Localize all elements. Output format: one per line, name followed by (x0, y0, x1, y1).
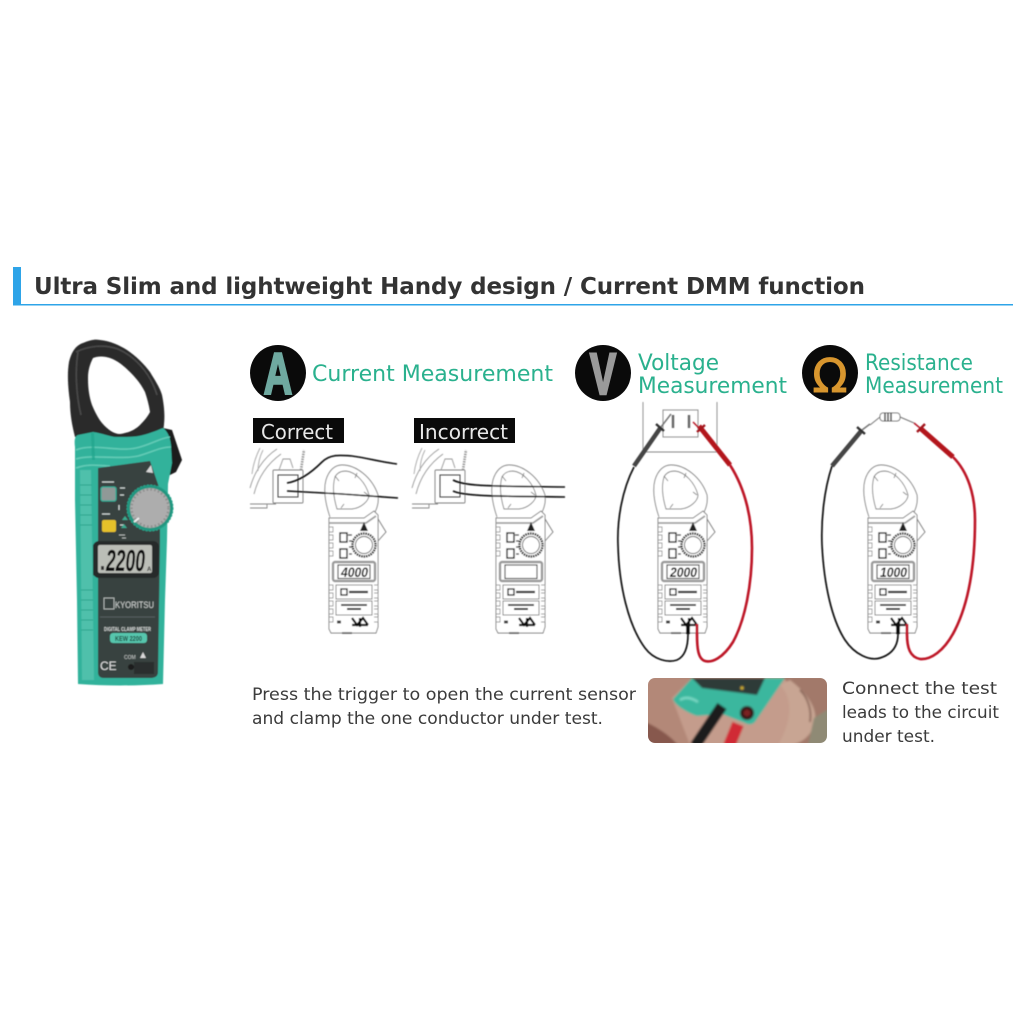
diagram: resistance measurement (822, 413, 975, 659)
LCD display: A (147, 567, 152, 573)
caption: test leads instructions: Connect the test (842, 679, 998, 698)
conductor wires (453, 480, 565, 487)
heading text: Ultra Slim and lightweight Handy design / Current DMM function (34, 274, 865, 300)
red test lead (693, 422, 752, 661)
tag: incorrect: Incorrect (419, 420, 508, 444)
icon: V (575, 341, 631, 407)
socket (412, 448, 466, 508)
black test lead (618, 414, 688, 661)
caption: test leads instructions: under test. (842, 727, 935, 746)
model label: DIGITAL CLAMP METER (104, 627, 151, 633)
model label: KEW 2200 (115, 634, 142, 643)
label: voltage measurement: Measurement (638, 374, 787, 399)
resistance measurement header (802, 345, 1003, 403)
icon: omega (802, 345, 858, 403)
display surround (93, 541, 159, 578)
current measurement header (250, 341, 553, 407)
caption: clamp instructions (252, 685, 636, 728)
product photo: clamp meter (68, 340, 182, 686)
CE mark and terminals: CE (100, 659, 117, 673)
dark face panel (93, 461, 160, 678)
label: resistance measurement (865, 351, 1003, 399)
display reading: 4000 (340, 564, 368, 580)
diagram: incorrect clamp (412, 448, 565, 633)
label: voltage measurement: Voltage (638, 351, 719, 376)
icon: V: V (590, 341, 616, 407)
label: resistance measurement: Resistance (865, 351, 973, 376)
label: current measurement: Current Measurement (312, 362, 553, 387)
model label (104, 627, 151, 643)
icon: omega: Ω (812, 349, 848, 403)
display reading: 2000 (669, 564, 697, 580)
rotary dial (127, 485, 173, 531)
brand text: KYORITSU (115, 600, 154, 611)
caption: test leads instructions: leads to the circuit (842, 703, 1000, 722)
tag: correct: Correct (261, 420, 333, 444)
trigger (163, 428, 182, 476)
heading accent bar (13, 267, 21, 304)
caption: test leads instructions (842, 679, 1000, 746)
red test lead (907, 423, 975, 659)
CE mark and terminals (100, 652, 154, 674)
wall outlet (643, 402, 717, 452)
LCD display: 2200 (105, 543, 145, 578)
display reading: 1000 (880, 564, 907, 580)
caption: clamp instructions: Press the trigger to open the current sensor (252, 685, 636, 704)
socket (250, 448, 304, 508)
brand text (100, 598, 155, 617)
meter line art (654, 465, 715, 633)
icon: A: A (264, 341, 292, 407)
meter line art (864, 465, 925, 633)
resistor (870, 413, 914, 425)
heading underline (13, 304, 1013, 306)
icon: A (250, 341, 306, 407)
caption: clamp instructions: and clamp the one conductor under test. (252, 709, 603, 728)
label: resistance measurement: Measurement (865, 374, 1003, 399)
black test lead (822, 424, 898, 659)
LCD display (98, 543, 152, 578)
section heading (13, 267, 1013, 306)
diagram: voltage measurement (618, 402, 752, 661)
meter line art (325, 465, 386, 633)
label: voltage measurement (638, 351, 787, 399)
meter body (75, 428, 172, 686)
diagram: correct clamp (250, 448, 398, 633)
CE mark and terminals: COM (124, 655, 136, 661)
buttons (101, 465, 153, 538)
meter line art (492, 465, 553, 633)
conductor wires (287, 455, 397, 483)
photo: test leads plugged into meter (648, 678, 827, 743)
voltage measurement header (575, 341, 787, 407)
clamp jaw (68, 340, 164, 442)
